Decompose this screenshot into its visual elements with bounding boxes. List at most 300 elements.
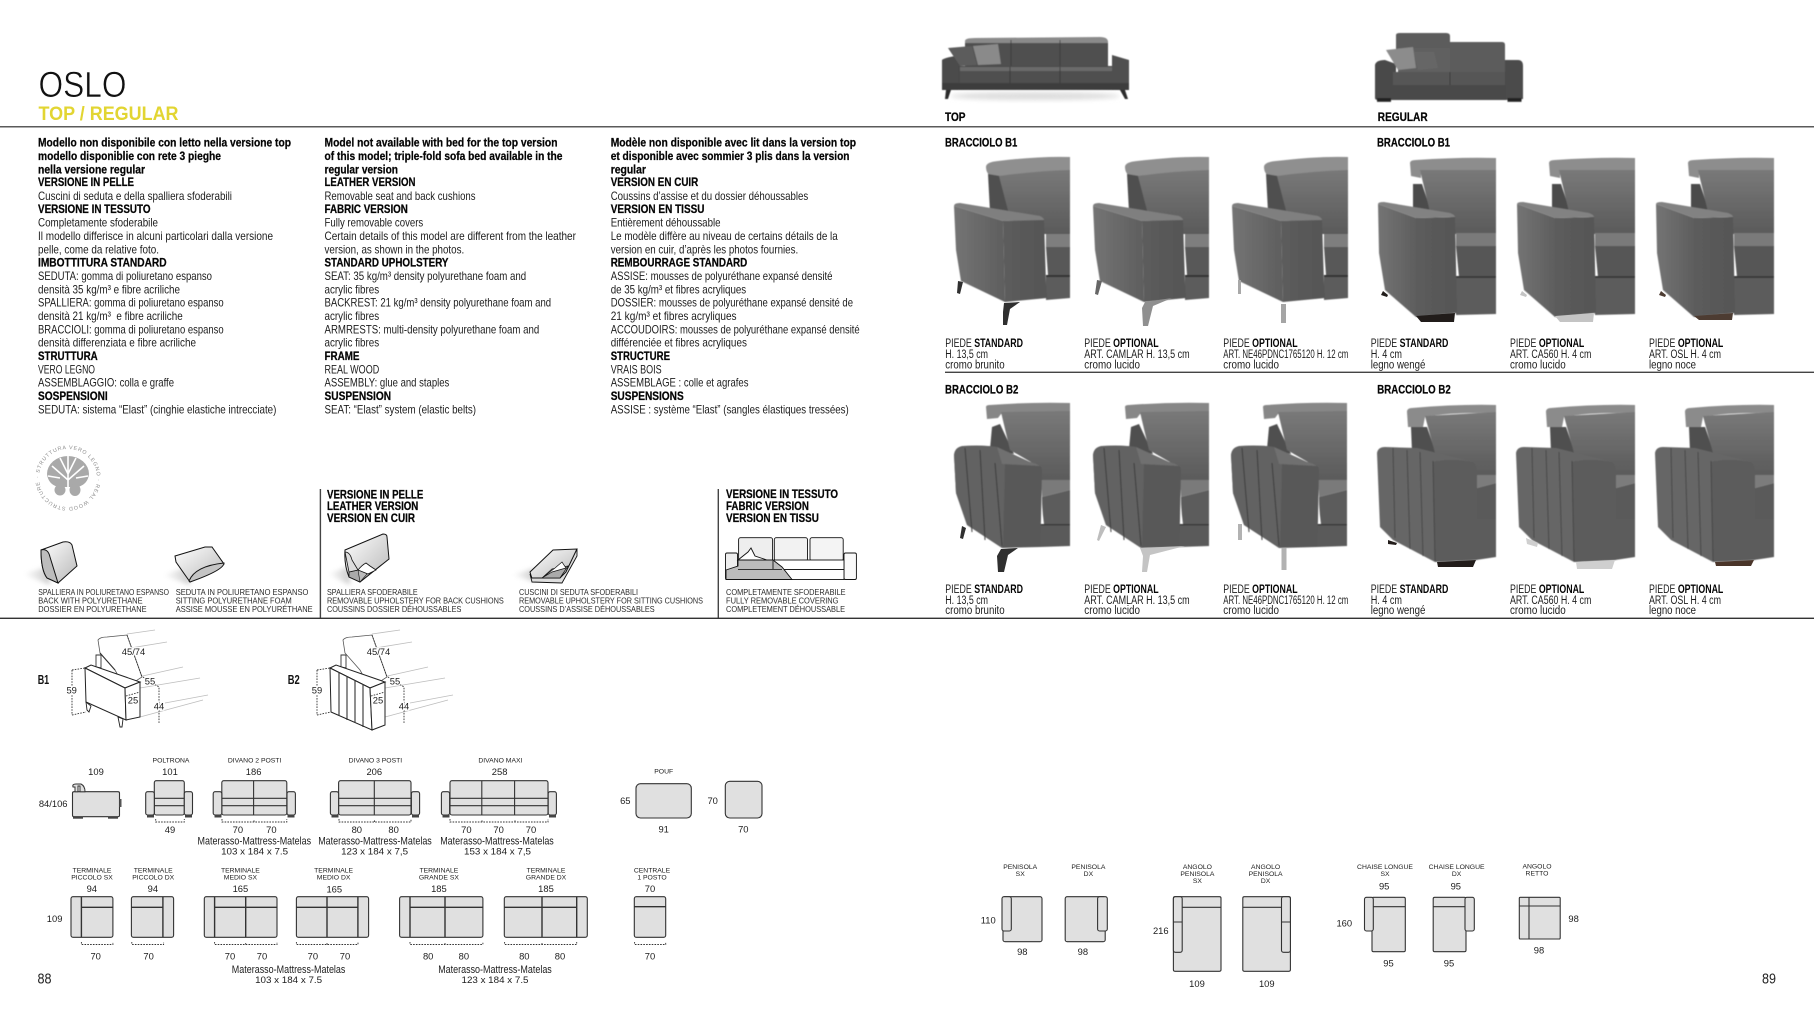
text block: French description: ASSISE : système “Elast” (sangles élastiques tressées) xyxy=(611,402,849,416)
diagram: terminale grande DX xyxy=(504,868,587,961)
caption: B1 top Camlar xyxy=(1084,338,1190,372)
diagram: terminale grande SX: 80 xyxy=(459,950,469,961)
caption: B1 top standard xyxy=(945,338,1023,372)
diagram: angolo retto: 98 xyxy=(1568,913,1579,924)
photo: B2 regular CA560 foot xyxy=(1516,405,1635,569)
caption: B2 top standard: H. 13,5 cm xyxy=(945,595,988,607)
caption: B1 regular CA560: PIEDE OPTIONAL xyxy=(1510,338,1584,350)
diagram: divano 3 posti xyxy=(318,758,432,857)
caption: B2 top standard xyxy=(945,584,1023,617)
icon: removable seat cover xyxy=(512,549,577,583)
text block: English description: regular version xyxy=(324,162,398,176)
caption: B1 regular standard: H. 4 cm xyxy=(1371,349,1402,361)
caption: B2 regular OSL: PIEDE OPTIONAL xyxy=(1649,584,1723,596)
diagram: penisola SX xyxy=(981,864,1042,957)
heading: fabric version: VERSION EN TISSU xyxy=(726,511,819,525)
caption: removable seat: CUSCINI DI SEDUTA SFODERABILI xyxy=(519,587,638,597)
text block: French description: ACCOUDOIRS: mousses de polyuréthane expansé densité xyxy=(611,322,860,336)
diagram: divano 2 posti: Materasso-Mattress-Matelas xyxy=(198,835,312,847)
caption: B1 regular CA560 xyxy=(1510,338,1591,372)
diagram: penisola SX: 110 xyxy=(981,914,996,926)
text block: French description: SUSPENSIONS xyxy=(611,389,684,403)
diagram: terminale medio SX: 165 xyxy=(233,883,248,894)
text block: Italian description: SOSPENSIONI xyxy=(38,389,108,403)
diagram: terminale piccolo DX: 70 xyxy=(143,950,154,961)
text block: English description: of this model; triple-fold sofa bed available in the xyxy=(324,149,563,163)
label: B2: B2 xyxy=(288,672,300,687)
caption: B2 top NE46 xyxy=(1223,584,1348,617)
text block: English description: ASSEMBLY: glue and staples xyxy=(324,376,449,390)
caption: B2 regular OSL xyxy=(1649,584,1723,617)
caption: B2 top Camlar: cromo lucido xyxy=(1084,605,1140,617)
diagram: terminale grande SX: 80 xyxy=(423,950,433,961)
text block: French description: VERSION EN TISSU xyxy=(611,202,704,216)
diagram: terminale piccolo DX: 94 xyxy=(148,883,158,894)
header rule xyxy=(0,126,1814,128)
caption: B1 top NE46: PIEDE OPTIONAL xyxy=(1223,338,1298,350)
diagram: terminale grande DX: GRANDE DX xyxy=(526,874,567,882)
diagram: pouf 70 x 70: 70 xyxy=(738,824,749,834)
diagram: terminale medio SX xyxy=(204,868,277,961)
caption: B1 top standard: cromo brunito xyxy=(945,360,1005,372)
diagram: terminale grande DX: 80 xyxy=(555,950,565,961)
text block: French description: REMBOURRAGE STANDARD xyxy=(611,255,748,269)
caption: B2 regular CA560: ART. CA560 H. 4 cm xyxy=(1510,595,1591,607)
diagram: penisola SX: SX xyxy=(1016,871,1025,878)
diagram: B2 arm dimensions: 25 xyxy=(373,694,383,706)
text block: Italian description: IMBOTTITURA STANDARD xyxy=(38,255,167,269)
diagram: angolo penisola DX: ANGOLO xyxy=(1251,864,1280,871)
text block: Italian description: ASSEMBLAGGIO: colla e graffe xyxy=(38,376,174,390)
diagram: terminale grande SX: 185 xyxy=(431,883,447,894)
text block: Italian description: SPALLIERA: gomma di poliuretano espanso xyxy=(38,296,224,310)
diagram: chaise longue DX: CHAISE LONGUE xyxy=(1429,864,1485,871)
caption: B1 top NE46 xyxy=(1223,338,1348,372)
heading: fabric version: VERSIONE IN TESSUTO xyxy=(726,487,838,501)
text block: Italian description: STRUTTURA xyxy=(38,349,98,363)
diagram: armchair poltrona: 49 xyxy=(165,824,175,835)
diagram: terminale piccolo SX: 70 xyxy=(90,950,101,961)
diagram: terminale piccolo DX: PICCOLO DX xyxy=(132,874,175,882)
text block: Italian description: Il modello differisce in alcuni particolari dalla versione xyxy=(38,229,273,243)
page number 88: 88 xyxy=(38,972,52,988)
diagram: divano maxi: 70 xyxy=(493,824,504,835)
photo: B2 top Camlar foot xyxy=(1093,403,1209,572)
text block: French description: différenciée et fibres acryliques xyxy=(611,336,747,350)
text block: English description: acrylic fibres xyxy=(324,336,379,350)
heading: Bracciolo B2 top: BRACCIOLO B2 xyxy=(945,382,1019,396)
diagram: terminale medio DX: TERMINALE xyxy=(314,868,354,874)
caption: B1 regular OSL: PIEDE OPTIONAL xyxy=(1649,338,1723,350)
text block: English description: Certain details of this model are different from the leather xyxy=(324,229,576,243)
text block: French description: et disponible avec sommier 3 plis dans la version xyxy=(611,149,850,163)
caption: removable back: COUSSINS DOSSIER DÉHOUSSABLES xyxy=(327,604,462,614)
diagram: angolo penisola SX: ANGOLO xyxy=(1183,864,1212,871)
caption: B2 top NE46: ART. NE46PDNC1765120 H. 12 cm xyxy=(1223,595,1348,607)
diagram: terminale piccolo DX: TERMINALE xyxy=(134,868,173,874)
text block: Italian description xyxy=(38,136,291,416)
icon: polyurethane back cushion xyxy=(23,542,77,585)
caption: fully removable: FULLY REMOVABLE COVERING xyxy=(726,596,838,606)
text block: English description: version, as shown in the photos. xyxy=(324,242,464,256)
diagram: terminale grande SX: TERMINALE xyxy=(419,868,459,874)
diagram: terminale medio DX: MEDIO DX xyxy=(317,874,351,882)
diagram: angolo retto: 98 xyxy=(1534,944,1544,955)
text block: English description: FRAME xyxy=(324,349,360,363)
text block: English description: SEAT: “Elast” system (elastic belts) xyxy=(324,402,476,416)
photo: B2 top standard foot xyxy=(954,403,1070,572)
diagram: B1 arm dimensions xyxy=(66,630,208,727)
caption: removable seat: REMOVABLE UPHOLSTERY FOR SITTING CUSHIONS xyxy=(519,596,703,606)
diagram: angolo retto: ANGOLO xyxy=(1522,864,1552,871)
diagram: chaise longue SX: 160 xyxy=(1336,917,1352,928)
label: TOP: TOP xyxy=(945,110,966,124)
diagram: terminale piccolo DX xyxy=(131,868,175,961)
heading: Bracciolo B1 regular: BRACCIOLO B1 xyxy=(1377,136,1450,150)
text block: Italian description: nella versione regular xyxy=(38,162,145,176)
diagram: divano 2 posti xyxy=(198,758,312,857)
text block: Italian description: densità differenziata e fibre acriliche xyxy=(38,336,196,350)
text block: Italian description: VERO LEGNO xyxy=(38,362,95,376)
text block: English description: REAL WOOD xyxy=(324,362,379,376)
diagram: divano 2 posti: 186 xyxy=(246,766,261,777)
caption: B2 regular standard xyxy=(1371,584,1448,617)
caption: B2 top Camlar: PIEDE OPTIONAL xyxy=(1084,584,1159,596)
text block: French description: VRAIS BOIS xyxy=(611,362,662,376)
caption: removable seat xyxy=(519,587,703,614)
text block: French description: regular xyxy=(611,162,646,176)
caption: removable back xyxy=(327,587,504,614)
label: mattress medio: 103 x 184 x 7.5 xyxy=(255,974,322,985)
caption: B2 regular standard: PIEDE STANDARD xyxy=(1371,584,1448,596)
photo: B1 top standard foot xyxy=(954,157,1070,325)
diagram: armchair poltrona: POLTRONA xyxy=(153,758,190,765)
diagram: centrale 1 posto xyxy=(634,868,671,961)
text block: Italian description: densità 21 kg/m³ e fibre acriliche xyxy=(38,309,183,323)
caption: B2 top standard: PIEDE STANDARD xyxy=(945,584,1023,596)
diagram: angolo penisola SX: SX xyxy=(1193,878,1202,885)
label: B1: B1 xyxy=(38,672,49,687)
diagram: angolo penisola DX: PENISOLA xyxy=(1249,871,1283,878)
photo: B2 top NE46 foot xyxy=(1231,403,1347,570)
caption: B1 top NE46: ART. NE46PDNC1765120 H. 12 cm xyxy=(1223,349,1348,361)
diagram: B2 arm dimensions: 44 xyxy=(399,700,409,712)
diagram: pouf 91 x 65: POUF xyxy=(654,768,673,775)
title: OSLO: OSLO xyxy=(38,64,126,105)
diagram: divano maxi: 70 xyxy=(526,824,536,835)
caption: B2 regular OSL: legno noce xyxy=(1649,605,1696,617)
label: mattress medio: Materasso-Mattress-Matelas xyxy=(232,964,346,976)
photo: B1 regular CA560 foot xyxy=(1517,158,1635,322)
diagram: divano maxi: 153 x 184 x 7,5 xyxy=(464,846,531,857)
label: mattress grande: 123 x 184 x 7.5 xyxy=(462,974,528,985)
caption: B1 regular OSL: ART. OSL H. 4 cm xyxy=(1649,349,1721,361)
caption: B2 regular OSL: ART. OSL H. 4 cm xyxy=(1649,595,1721,607)
caption: B1 regular OSL xyxy=(1649,338,1723,372)
diagram: divano maxi xyxy=(440,758,556,857)
diagram: penisola SX: 98 xyxy=(1017,946,1028,957)
diagram: B1 arm dimensions: 59 xyxy=(66,684,77,696)
diagram: angolo retto: RETTO xyxy=(1526,871,1548,878)
diagram: side view 84/106 x 109 xyxy=(39,766,122,819)
diagram: pouf 70 x 70 xyxy=(707,781,762,834)
text block: Italian description: Completamente sfoderabile xyxy=(38,216,158,230)
caption: B2 regular CA560: PIEDE OPTIONAL xyxy=(1510,584,1584,596)
text block: Italian description: densità 35 kg/m³ e fibre acriliche xyxy=(38,282,180,296)
diagram: divano 2 posti: 103 x 184 x 7.5 xyxy=(221,846,288,857)
text block: English description: FABRIC VERSION xyxy=(324,202,408,216)
diagram: centrale 1 posto: CENTRALE xyxy=(634,868,671,874)
diagram: terminale medio SX: 70 xyxy=(225,950,235,961)
diagram: divano maxi: DIVANO MAXI xyxy=(478,758,523,765)
text block: Italian description: SEDUTA: gomma di poliuretano espanso xyxy=(38,269,212,283)
label: REGULAR: REGULAR xyxy=(1378,110,1428,124)
diagram: chaise longue DX: 95 xyxy=(1444,958,1454,969)
caption: B2 regular standard: legno wengé xyxy=(1371,605,1425,617)
diagram: terminale grande DX: TERMINALE xyxy=(527,868,566,874)
diagram: penisola DX xyxy=(1065,864,1107,957)
diagram: divano maxi: Materasso-Mattress-Matelas xyxy=(440,835,554,847)
caption: B1 top NE46: cromo lucido xyxy=(1223,360,1279,372)
heading: Bracciolo B2 regular: BRACCIOLO B2 xyxy=(1377,382,1451,396)
text block: French description: Entièrement déhoussable xyxy=(611,216,721,230)
diagram: side view 84/106 x 109: 84/106 xyxy=(39,798,68,809)
diagram: pouf 91 x 65 xyxy=(620,768,691,834)
caption: removable seat: COUSSINS D’ASSISE DÉHOUSSABLES xyxy=(519,604,655,614)
diagram: penisola SX: PENISOLA xyxy=(1003,864,1038,871)
diagram: terminale medio DX xyxy=(296,868,369,961)
diagram: terminale medio SX: 70 xyxy=(257,950,267,961)
diagram: divano 3 posti: 206 xyxy=(366,766,382,777)
diagram: terminale piccolo SX: TERMINALE xyxy=(73,868,112,874)
diagram: terminale grande DX: 185 xyxy=(538,883,554,894)
caption: B1 regular standard: PIEDE STANDARD xyxy=(1371,338,1448,350)
diagram: angolo penisola SX xyxy=(1153,864,1221,989)
diagram: angolo penisola DX: 109 xyxy=(1259,978,1275,989)
caption: fully removable: COMPLETEMENT DÉHOUSSABLE xyxy=(726,604,845,614)
diagram: terminale medio DX: 165 xyxy=(326,883,342,894)
caption: B2 regular CA560 xyxy=(1510,584,1591,617)
diagram: chaise longue DX xyxy=(1429,864,1485,969)
caption: fully removable xyxy=(726,587,846,614)
caption: B1 regular CA560: ART. CA560 H. 4 cm xyxy=(1510,349,1591,361)
text block: French description: DOSSIER: mousses de polyuréthane expansé densité de xyxy=(611,296,853,310)
caption: B2 top NE46: PIEDE OPTIONAL xyxy=(1223,584,1298,596)
photo: B2 regular standard foot xyxy=(1377,405,1496,567)
diagram: pouf 91 x 65: 91 xyxy=(658,824,669,834)
text block: Italian description: modello disponiblie con rete 3 pieghe xyxy=(38,149,221,163)
diagram: B2 arm dimensions: 59 xyxy=(312,684,322,696)
diagram: terminale medio SX: TERMINALE xyxy=(221,868,260,874)
diagram: B2 arm dimensions: 55 xyxy=(390,676,400,686)
label: mattress grande: Materasso-Mattress-Matelas xyxy=(438,964,552,976)
diagram: side view 84/106 x 109: 109 xyxy=(88,766,104,777)
diagram: armchair poltrona xyxy=(146,758,192,835)
diagram: chaise longue DX: DX xyxy=(1452,871,1462,878)
heading: Bracciolo B1 top: BRACCIOLO B1 xyxy=(945,136,1018,150)
text block: Italian description: SEDUTA: sistema “Elast” (cinghie elastiche intrecciate) xyxy=(38,402,276,416)
text block: French description: de 35 kg/m³ et fibres acryliques xyxy=(611,282,746,296)
photo: B2 regular OSL foot xyxy=(1655,405,1774,566)
heading: leather version: VERSIONE IN PELLE xyxy=(327,487,423,501)
diagram: pouf 70 x 70: 70 xyxy=(707,795,718,806)
text block: English description: Removable seat and back cushions xyxy=(324,189,476,203)
heading: leather version xyxy=(327,487,423,525)
diagram: pouf 91 x 65: 65 xyxy=(620,795,631,806)
caption: B1 top standard: H. 13,5 cm xyxy=(945,349,988,361)
text block: French description: ASSISE: mousses de polyuréthane expansé densité xyxy=(611,269,833,283)
diagram: divano 3 posti: 123 x 184 x 7,5 xyxy=(341,846,408,857)
divider: fabric section xyxy=(718,489,719,618)
text block: French description: Modèle non disponible avec lit dans la version top xyxy=(611,136,856,150)
diagram: divano 3 posti: 80 xyxy=(352,824,362,835)
text block: English description: LEATHER VERSION xyxy=(324,175,416,189)
diagram: B1 arm dimensions: 45/74 xyxy=(122,646,145,657)
text block: French description: Le modèle diffère au niveau de certains détails de la xyxy=(611,229,838,243)
caption: polyurethane seat: SITTING POLYURETHANE FOAM xyxy=(176,596,292,606)
label: mattress grande xyxy=(438,964,552,985)
text block: French description: Coussins d’assise et du dossier déhoussables xyxy=(611,189,808,203)
icon: polyurethane seat cushion xyxy=(163,547,224,585)
caption: polyurethane back: SPALLIERA IN POLIURETANO ESPANSO xyxy=(38,587,169,597)
diagram: B1 arm dimensions: 25 xyxy=(128,694,138,706)
text block: French description: 21 kg/m³ et fibres acryliques xyxy=(611,309,737,323)
caption: B1 regular standard xyxy=(1371,338,1448,372)
caption: B1 regular OSL: legno noce xyxy=(1649,360,1696,372)
photo: REGULAR sofa xyxy=(1375,33,1523,102)
diagram: penisola DX: DX xyxy=(1084,871,1094,878)
heading: leather version: LEATHER VERSION xyxy=(327,499,418,513)
text block: English description: acrylic fibres xyxy=(324,282,379,296)
diagram: terminale medio DX: 70 xyxy=(308,950,318,961)
text block: English description: SUSPENSION xyxy=(324,389,391,403)
caption: B2 top standard: cromo brunito xyxy=(945,605,1005,617)
heading: leather version: VERSION EN CUIR xyxy=(327,511,415,525)
text block: French description: VERSION EN CUIR xyxy=(611,175,699,189)
diagram: angolo retto xyxy=(1519,864,1579,955)
diagram: B1 arm dimensions: 55 xyxy=(145,676,155,686)
caption: polyurethane back: DOSSIER EN POLYURETHANE xyxy=(38,604,147,614)
subtitle: TOP / REGULAR: TOP / REGULAR xyxy=(38,103,178,125)
icon: real wood structure seal: · STRUTTURA VERO LEGNO · REAL WOOD STRUCTURE xyxy=(36,445,100,510)
caption: B2 top Camlar: ART. CAMLAR H. 13,5 cm xyxy=(1084,595,1190,607)
diagram: divano 3 posti: DIVANO 3 POSTI xyxy=(349,758,402,765)
caption: B2 top NE46: cromo lucido xyxy=(1223,605,1279,617)
caption: B1 regular CA560: cromo lucido xyxy=(1510,360,1566,372)
caption: B2 top Camlar xyxy=(1084,584,1190,617)
text block: Italian description: BRACCIOLI: gomma di poliuretano espanso xyxy=(38,322,224,336)
diagram: chaise longue SX: 95 xyxy=(1383,958,1394,969)
caption: polyurethane seat xyxy=(176,587,313,614)
text block: Italian description: Modello non disponibile con letto nella versione top xyxy=(38,136,291,150)
diagram: chaise longue DX: 95 xyxy=(1451,880,1461,892)
diagram: penisola DX: PENISOLA xyxy=(1071,864,1106,871)
diagram: angolo penisola SX: 216 xyxy=(1153,925,1169,936)
diagram: divano 3 posti: 80 xyxy=(388,824,399,835)
text block: English description: Fully removable covers xyxy=(324,216,423,230)
diagram: armchair poltrona: 101 xyxy=(162,766,178,777)
icon: fully removable sofa cover xyxy=(726,538,856,580)
photo: B1 top NE46 foot xyxy=(1232,157,1348,323)
caption: B1 top Camlar: PIEDE OPTIONAL xyxy=(1084,338,1159,350)
diagram: divano 2 posti: 70 xyxy=(266,824,277,835)
photo: B1 regular OSL foot xyxy=(1656,158,1774,320)
diagram: chaise longue SX xyxy=(1336,864,1413,969)
caption: removable back: SPALLIERA SFODERABILE xyxy=(327,587,418,597)
text block: Italian description: pelle, come da relative foto. xyxy=(38,242,159,256)
heading: fabric version xyxy=(726,487,838,525)
text block: English description: SEAT: 35 kg/m³ density polyurethane foam and xyxy=(324,269,526,283)
diagram: angolo penisola DX xyxy=(1243,864,1290,989)
photo: TOP sofa xyxy=(942,37,1129,100)
caption: removable back: REMOVABLE UPHOLSTERY FOR BACK CUSHIONS xyxy=(327,596,504,606)
caption: B1 top Camlar: ART. CAMLAR H. 13,5 cm xyxy=(1084,349,1190,361)
diagram: centrale 1 posto: 70 xyxy=(645,950,655,961)
text block: English description: STANDARD UPHOLSTERY xyxy=(324,255,448,269)
caption: fully removable: COMPLETAMENTE SFODERABILE xyxy=(726,587,846,597)
diagram: divano 2 posti: 70 xyxy=(233,824,243,835)
caption: polyurethane back xyxy=(38,587,169,614)
caption: B2 regular CA560: cromo lucido xyxy=(1510,605,1566,617)
diagram: angolo penisola SX: PENISOLA xyxy=(1180,871,1215,878)
text block: English description: acrylic fibres xyxy=(324,309,379,323)
diagram: terminale piccolo SX xyxy=(71,868,113,961)
diagram: terminale piccolo SX: 94 xyxy=(87,883,97,894)
diagram: divano maxi: 70 xyxy=(461,824,472,835)
caption: B1 top standard: PIEDE STANDARD xyxy=(945,338,1023,350)
photo: B1 top Camlar foot xyxy=(1093,157,1209,326)
diagram: angolo penisola SX: 109 xyxy=(1189,978,1205,989)
page number 89: 89 xyxy=(1762,972,1776,988)
diagram: divano 2 posti: DIVANO 2 POSTI xyxy=(228,758,281,765)
diagram: terminale grande SX xyxy=(400,868,483,961)
diagram: B2 arm dimensions: 45/74 xyxy=(367,646,390,657)
photo: B1 regular standard foot xyxy=(1378,158,1496,322)
caption: B2 regular standard: H. 4 cm xyxy=(1371,595,1402,607)
text block: Italian description: VERSIONE IN PELLE xyxy=(38,175,134,189)
text block: French description: STRUCTURE xyxy=(611,349,670,363)
diagram: terminale piccolo SX: PICCOLO SX xyxy=(71,874,113,882)
diagram: terminale grande SX: GRANDE SX xyxy=(419,874,459,882)
diagram: centrale 1 posto: 1 POSTO xyxy=(637,874,667,882)
text block: Italian description: Cuscini di seduta e della spalliera sfoderabili xyxy=(38,189,232,203)
label: mattress medio xyxy=(232,964,346,985)
text block: French description: version en cuir, d’après les photos fournies. xyxy=(611,242,798,256)
diagram: chaise longue SX: SX xyxy=(1380,871,1390,878)
diagram: chaise longue SX: 95 xyxy=(1379,880,1389,892)
text block: English description: Model not available with bed for the top version xyxy=(324,136,558,150)
text block: French description xyxy=(611,136,860,416)
text block: Italian description: VERSIONE IN TESSUTO xyxy=(38,202,150,216)
icon: removable back cover xyxy=(328,534,389,585)
diagram: B2 arm dimensions xyxy=(312,630,453,730)
diagram: terminale medio SX: MEDIO SX xyxy=(224,874,257,882)
diagram: divano maxi: 258 xyxy=(492,766,507,777)
caption: B1 regular standard: legno wengé xyxy=(1371,360,1425,372)
diagram: chaise longue SX: CHAISE LONGUE xyxy=(1357,864,1413,871)
text block: English description: BACKREST: 21 kg/m³ density polyurethane foam and xyxy=(324,296,551,310)
diagram: angolo penisola DX: DX xyxy=(1261,878,1271,885)
text block: French description: ASSEMBLAGE : colle et agrafes xyxy=(611,376,748,390)
text block: English description xyxy=(324,136,576,416)
caption: polyurethane seat: ASSISE MOUSSE EN POLYURÉTHANE xyxy=(176,604,313,614)
heading: fabric version: FABRIC VERSION xyxy=(726,499,809,513)
diagram: terminale medio DX: 70 xyxy=(340,950,350,961)
label: depth 109: 109 xyxy=(47,913,62,924)
diagram: B1 arm dimensions: 44 xyxy=(154,700,164,712)
text block: English description: ARMRESTS: multi-density polyurethane foam and xyxy=(324,322,539,336)
caption: polyurethane back: BACK WITH POLYURETHANE xyxy=(38,596,143,606)
